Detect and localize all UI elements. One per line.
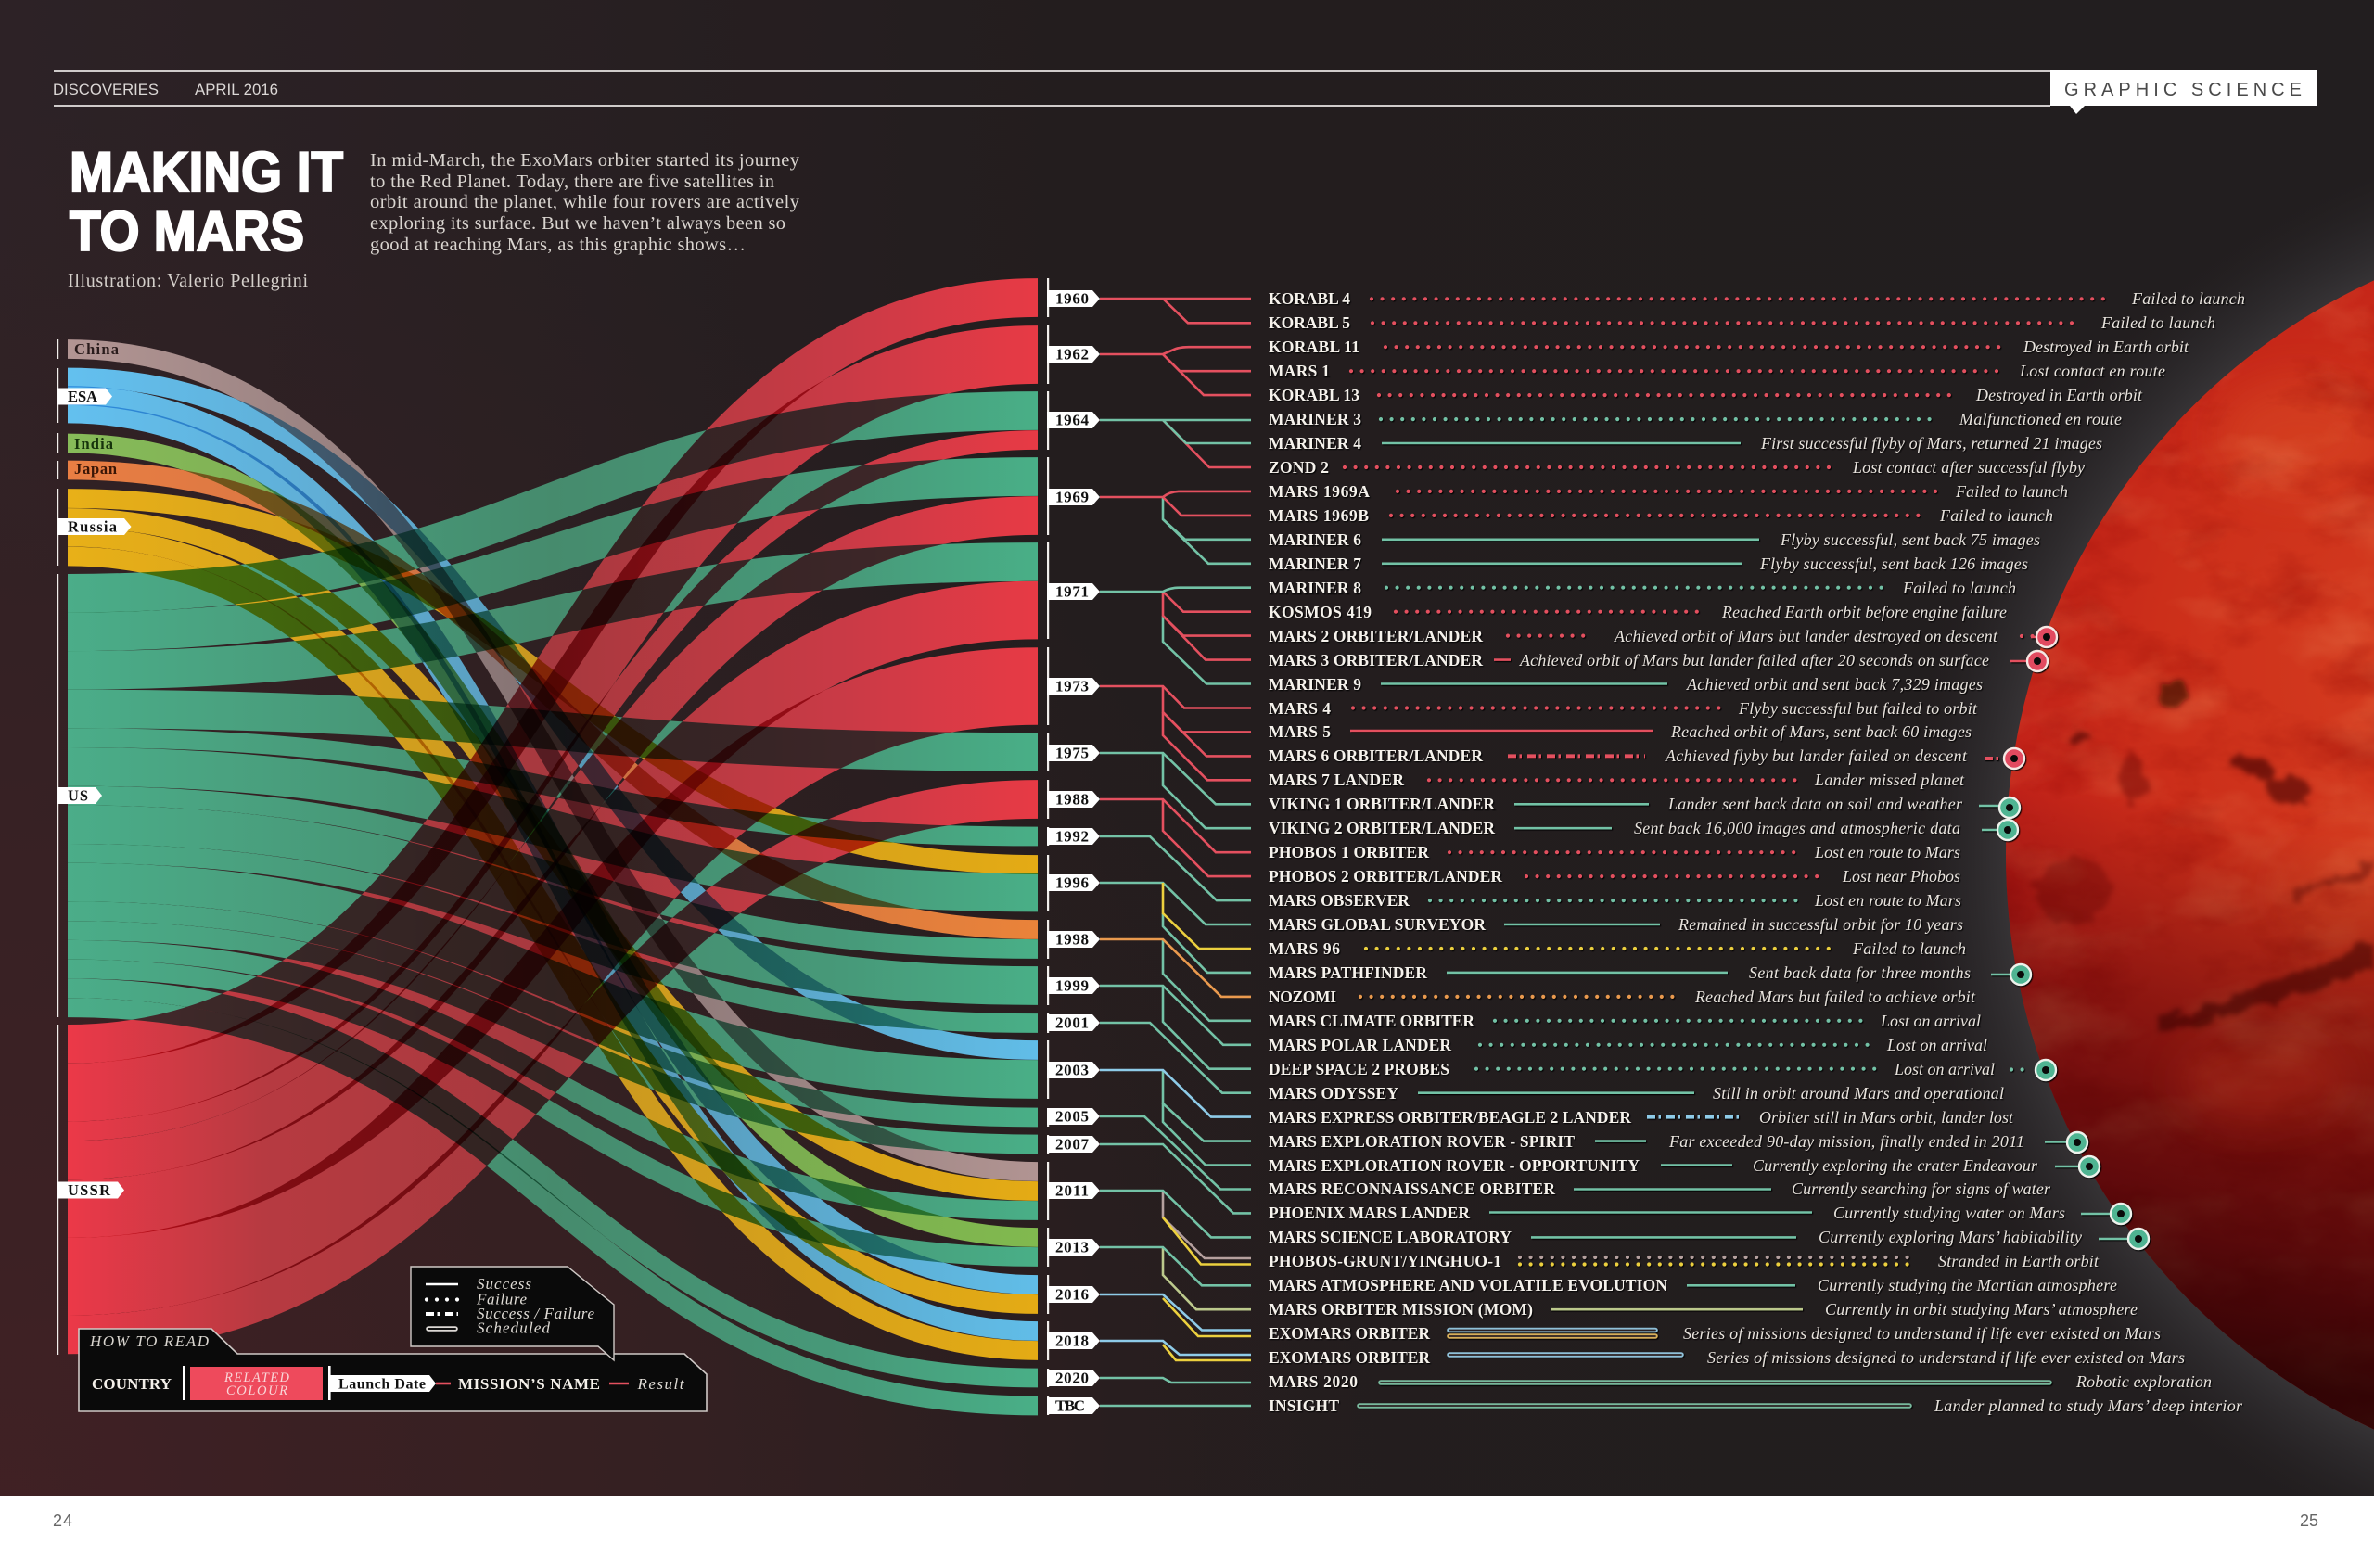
intro text: to the Red Planet. Today, there are five satellites in	[370, 172, 774, 192]
year 2007: 2007	[1055, 1135, 1089, 1154]
row: PHOENIX MARS LANDER: Currently studying water on Mars	[1833, 1204, 2065, 1222]
illustration credit: Illustration: Valerio Pellegrini	[68, 271, 308, 291]
row: KORABL 4	[1269, 289, 2245, 308]
graphic science badge	[2050, 70, 2317, 114]
page number 25: 25	[2300, 1511, 2318, 1530]
row: MARS EXPLORATION ROVER - SPIRIT	[1269, 1132, 2087, 1153]
year 2013: 2013	[1055, 1239, 1089, 1256]
row: PHOBOS 2 ORBITER/LANDER: PHOBOS 2 ORBITER/LANDER	[1269, 867, 1502, 886]
year 2020: 2020	[1055, 1369, 1089, 1387]
how to read panel	[79, 1329, 707, 1411]
row: MARS PATHFINDER: Sent back data for three months	[1749, 963, 1971, 982]
year 1998	[1047, 920, 1251, 1021]
year 1971: 1971	[1055, 582, 1089, 601]
ribbons: Russia	[68, 499, 1038, 1350]
row: KORABL 13	[1269, 386, 2143, 404]
row: MARS SCIENCE LABORATORY: MARS SCIENCE LABORATORY	[1269, 1228, 1512, 1246]
row: MARS OBSERVER: Lost en route to Mars	[1814, 891, 1961, 910]
row: VIKING 2 ORBITER/LANDER: VIKING 2 ORBITER/LANDER	[1269, 819, 1495, 837]
intro text: good at reaching Mars, as this graphic shows…	[370, 235, 746, 255]
row: MARS OBSERVER	[1269, 891, 1961, 910]
key: scheduled	[428, 1319, 551, 1337]
row: MARS 1: Lost contact en route	[2019, 362, 2165, 380]
row: MARS RECONNAISSANCE ORBITER	[1269, 1179, 2051, 1198]
row: MARS 1969A	[1269, 482, 2068, 501]
row: MARS 2020	[1269, 1372, 2212, 1391]
row: PHOENIX MARS LANDER: PHOENIX MARS LANDER	[1269, 1204, 1470, 1222]
row: MARINER 7: Flyby successful, sent back 126 images	[1759, 555, 2028, 573]
country axis bars	[57, 339, 58, 1355]
row: MARS EXPLORATION ROVER - OPPORTUNITY	[1269, 1156, 2100, 1177]
ribbons: China	[68, 349, 1038, 1172]
year 1973	[1047, 647, 1251, 780]
row: MARS 5: Reached orbit of Mars, sent back 60 images	[1670, 722, 1972, 741]
row: EXOMARS ORBITER 2016: EXOMARS ORBITER	[1269, 1324, 1430, 1343]
row: MARS 7 LANDER: Lander missed planet	[1814, 771, 1965, 789]
row: MARINER 3: MARINER 3	[1269, 410, 1361, 428]
row: MARINER 6: Flyby successful, sent back 75 images	[1780, 530, 2040, 549]
row: PHOBOS 2 ORBITER/LANDER: Lost near Phobos	[1842, 867, 1960, 886]
row: MARS 3 ORBITER/LANDER: Achieved orbit of Mars but lander failed after 20 seconds on surface	[1519, 651, 1989, 669]
row: MARS ODYSSEY	[1269, 1084, 2004, 1103]
row: NOZOMI: Reached Mars but failed to achieve orbit	[1694, 988, 1976, 1006]
year 1992	[1047, 827, 1251, 900]
row: MARS GLOBAL SURVEYOR: Remained in successful orbit for 10 years	[1678, 915, 1963, 934]
row: KORABL 13: Destroyed in Earth orbit	[1975, 386, 2143, 404]
row: MARS 3 ORBITER/LANDER	[1269, 651, 2048, 671]
row: MARS EXPLORATION ROVER - SPIRIT: MARS EXPLORATION ROVER - SPIRIT	[1269, 1132, 1575, 1151]
how to read heading: HOW TO READ	[89, 1332, 210, 1350]
row: DEEP SPACE 2 PROBES: DEEP SPACE 2 PROBES	[1269, 1060, 1449, 1078]
row: MARS CLIMATE ORBITER: Lost on arrival	[1880, 1012, 1981, 1030]
year 1992: 1992	[1055, 827, 1089, 846]
country label: China: China	[74, 340, 119, 358]
country label: USSR: USSR	[68, 1181, 111, 1199]
intro text: exploring its surface. But we haven’t always been so	[370, 213, 785, 234]
row: MARS 2 ORBITER/LANDER	[1269, 627, 2057, 647]
row: MARS 1969B: Failed to launch	[1939, 506, 2053, 525]
row: MARINER 4: MARINER 4	[1269, 434, 1361, 453]
intro text	[370, 150, 800, 255]
key: failure	[427, 1291, 527, 1307]
year 2011	[1047, 1162, 1251, 1265]
row: DEEP SPACE 2 PROBES	[1269, 1060, 2056, 1080]
row: MARS 6 ORBITER/LANDER: Achieved flyby but lander failed on descent	[1665, 746, 1968, 765]
row: KORABL 4: KORABL 4	[1269, 289, 1350, 308]
graphic science badge: GRAPHIC SCIENCE	[2064, 80, 2302, 100]
year 1975	[1047, 733, 1251, 828]
row: VIKING 2 ORBITER/LANDER: Sent back 16,000 images and atmospheric data	[1634, 819, 1960, 837]
row: MARS ORBITER MISSION (MOM): MARS ORBITER MISSION (MOM)	[1269, 1300, 1533, 1319]
row: PHOBOS-GRUNT/YINGHUO-1	[1269, 1252, 2100, 1270]
row: MARS GLOBAL SURVEYOR	[1269, 915, 1963, 934]
row: PHOBOS 1 ORBITER	[1269, 843, 1960, 861]
row: MARINER 8	[1269, 579, 2016, 597]
row: PHOENIX MARS LANDER	[1269, 1204, 2131, 1224]
row: MARS 2020: MARS 2020	[1269, 1372, 1358, 1391]
row: MARS 2 ORBITER/LANDER: MARS 2 ORBITER/LANDER	[1269, 627, 1483, 645]
row: MARS 1969A: MARS 1969A	[1269, 482, 1370, 501]
page footer strip	[0, 1496, 2374, 1568]
row: MARS 7 LANDER	[1269, 771, 1965, 789]
row: VIKING 1 ORBITER/LANDER: VIKING 1 ORBITER/LANDER	[1269, 795, 1495, 813]
row: KORABL 5: KORABL 5	[1269, 313, 1350, 332]
ribbons: US	[68, 411, 1038, 1406]
line style key	[411, 1267, 614, 1360]
year 1964: 1964	[1055, 412, 1089, 428]
year TBC	[1047, 1396, 1251, 1415]
row: MARS OBSERVER: MARS OBSERVER	[1269, 891, 1410, 910]
year 1960	[1047, 278, 1251, 323]
country label: India: India	[74, 435, 113, 453]
row: INSIGHT	[1269, 1396, 2243, 1415]
year 1969	[1047, 457, 1251, 564]
row: PHOBOS 2 ORBITER/LANDER	[1269, 867, 1960, 886]
row: MARS RECONNAISSANCE ORBITER: MARS RECONNAISSANCE ORBITER	[1269, 1179, 1555, 1198]
row: MARS 1: MARS 1	[1269, 362, 1330, 380]
ribbons: USSR	[68, 298, 1038, 1334]
section label: DISCOVERIES	[53, 82, 159, 98]
key: success	[426, 1275, 531, 1293]
legend: country: COUNTRY	[92, 1375, 172, 1393]
year 2018: 2018	[1055, 1332, 1089, 1350]
row: DEEP SPACE 2 PROBES: Lost on arrival	[1894, 1060, 1995, 1078]
row: KORABL 4: Failed to launch	[2131, 289, 2245, 308]
row: PHOBOS-GRUNT/YINGHUO-1: PHOBOS-GRUNT/YINGHUO-1	[1269, 1252, 1501, 1270]
row: ZOND 2: Lost contact after successful flyby	[1852, 458, 2085, 477]
row: MARS 4: MARS 4	[1269, 699, 1331, 718]
row: EXOMARS ORBITER 2016	[1269, 1324, 2161, 1343]
row: MARS RECONNAISSANCE ORBITER: Currently searching for signs of water	[1792, 1179, 2051, 1198]
year 1998: 1998	[1055, 931, 1089, 948]
row: MARINER 4: First successful flyby of Mars, returned 21 images	[1760, 434, 2102, 453]
page number 24: 24	[53, 1511, 72, 1530]
year 2001: 2001	[1055, 1014, 1089, 1031]
row: KOSMOS 419: KOSMOS 419	[1269, 603, 1372, 621]
year 2003	[1047, 1040, 1251, 1165]
legend: related colour swatch	[183, 1366, 323, 1400]
key: success / failure: Success / Failure	[477, 1305, 594, 1322]
row: KOSMOS 419	[1269, 603, 2007, 621]
row: INSIGHT: Lander planned to study Mars’ deep interior	[1934, 1396, 2243, 1415]
row: MARS 6 ORBITER/LANDER: MARS 6 ORBITER/LANDER	[1269, 746, 1483, 765]
row: MARS CLIMATE ORBITER: MARS CLIMATE ORBITER	[1269, 1012, 1474, 1030]
row: MARINER 8: MARINER 8	[1269, 579, 1361, 597]
year 2016: 2016	[1055, 1285, 1089, 1304]
country label: Japan: Japan	[74, 460, 117, 478]
row: MARS ATMOSPHERE AND VOLATILE EVOLUTION	[1269, 1276, 2117, 1294]
row: MARS EXPRESS ORBITER/BEAGLE 2 LANDER	[1269, 1108, 2014, 1127]
row: MARS 2 ORBITER/LANDER: Achieved orbit of Mars but lander destroyed on descent	[1614, 627, 1998, 645]
row: KORABL 11: Destroyed in Earth orbit	[2023, 338, 2189, 356]
row: EXOMARS ORBITER 2016: Series of missions designed to understand if life ever existed on Mars	[1683, 1324, 2161, 1343]
year 1996	[1047, 855, 1251, 973]
row: MARINER 9: MARINER 9	[1269, 675, 1361, 694]
country label: US: US	[68, 786, 88, 805]
year 1971	[1047, 542, 1251, 684]
legend: launch date tag	[328, 1366, 436, 1400]
row: MARS 5	[1269, 722, 1972, 741]
row: MARINER 6	[1269, 530, 2040, 549]
row: MARINER 9: Achieved orbit and sent back 7,329 images	[1686, 675, 1983, 694]
row: MARINER 3	[1269, 410, 2122, 428]
country label: Russia	[57, 517, 132, 536]
row: MARS SCIENCE LABORATORY	[1269, 1228, 2149, 1249]
key: failure: Failure	[476, 1291, 527, 1307]
row: PHOBOS 1 ORBITER: Lost en route to Mars	[1814, 843, 1960, 861]
year 1999	[1047, 966, 1251, 1069]
row: EXOMARS ORBITER 2018: Series of missions designed to understand if life ever existed on Mars	[1707, 1348, 2185, 1367]
row: MARS POLAR LANDER: Lost on arrival	[1886, 1036, 1987, 1054]
row: MARS PATHFINDER	[1269, 963, 2031, 985]
title	[70, 141, 343, 262]
row: MARS ORBITER MISSION (MOM): Currently in orbit studying Mars’ atmosphere	[1825, 1300, 2138, 1319]
year 1975: 1975	[1055, 744, 1089, 762]
title: TO MARS	[70, 200, 304, 262]
year 2007	[1047, 1135, 1251, 1213]
row: MARS 7 LANDER: MARS 7 LANDER	[1269, 771, 1404, 789]
country label: Russia: Russia	[68, 517, 117, 536]
row: MARS POLAR LANDER: MARS POLAR LANDER	[1269, 1036, 1451, 1054]
ribbons: ESA	[68, 377, 1038, 1332]
legend: related colour swatch: RELATED	[223, 1370, 290, 1385]
row: NOZOMI: NOZOMI	[1269, 988, 1336, 1006]
row: MARS ORBITER MISSION (MOM)	[1269, 1300, 2138, 1319]
row: MARS 4	[1269, 699, 1978, 718]
row: ZOND 2	[1269, 458, 2085, 477]
planet Mars	[1957, 227, 2374, 1482]
row: MARS ATMOSPHERE AND VOLATILE EVOLUTION: Currently studying the Martian atmosphere	[1818, 1276, 2117, 1294]
year tags and connectors	[1047, 278, 1251, 1415]
year 2020	[1047, 1369, 1251, 1387]
row: MARS ODYSSEY: Still in orbit around Mars and operational	[1713, 1084, 2004, 1103]
row: VIKING 2 ORBITER/LANDER	[1269, 819, 2018, 840]
row: MARS 96: MARS 96	[1269, 939, 1340, 958]
intro text: orbit around the planet, while four rovers are actively	[370, 192, 800, 212]
row: MARS 1969B: MARS 1969B	[1269, 506, 1369, 525]
row: KOSMOS 419: Reached Earth orbit before engine failure	[1721, 603, 2007, 621]
row: KORABL 11	[1269, 338, 2189, 356]
row: MARINER 3: Malfunctioned en route	[1959, 410, 2122, 428]
header rules	[54, 70, 2050, 107]
row: MARINER 7: MARINER 7	[1269, 555, 1361, 573]
row: MARS 4: Flyby successful but failed to orbit	[1738, 699, 1978, 718]
row: MARS EXPRESS ORBITER/BEAGLE 2 LANDER: Orbiter still in Mars orbit, lander lost	[1759, 1108, 2014, 1127]
legend: result: Result	[636, 1375, 685, 1393]
ribbons: Japan	[68, 470, 1038, 929]
row: EXOMARS ORBITER 2018	[1269, 1348, 2185, 1367]
year 2018	[1047, 1321, 1251, 1360]
row: KORABL 11: KORABL 11	[1269, 338, 1359, 356]
year 2011: 2011	[1055, 1181, 1089, 1200]
year 1988: 1988	[1055, 790, 1089, 809]
row: MARS SCIENCE LABORATORY: Currently exploring Mars’ habitability	[1819, 1228, 2082, 1246]
row: MARS EXPRESS ORBITER/BEAGLE 2 LANDER: MARS EXPRESS ORBITER/BEAGLE 2 LANDER	[1269, 1108, 1631, 1127]
title: MAKING IT	[70, 141, 343, 203]
year 2005: 2005	[1055, 1107, 1089, 1126]
row: MARINER 4	[1269, 434, 2102, 453]
legend: result	[609, 1375, 685, 1393]
year 1973: 1973	[1055, 677, 1089, 695]
row: MARS POLAR LANDER	[1269, 1036, 1987, 1054]
country label: US	[57, 786, 102, 805]
row: MARINER 7	[1269, 555, 2028, 573]
row: MARINER 8: Failed to launch	[1902, 579, 2016, 597]
year 1962: 1962	[1055, 345, 1089, 363]
country label: ESA: ESA	[68, 388, 97, 405]
country label: ESA	[57, 388, 112, 405]
row: PHOBOS-GRUNT/YINGHUO-1: Stranded in Earth orbit	[1938, 1252, 2100, 1270]
legend: related colour swatch: COLOUR	[226, 1383, 287, 1398]
row: NOZOMI	[1269, 988, 1976, 1006]
year 2005	[1047, 1107, 1251, 1189]
row: MARS 1969A: Failed to launch	[1955, 482, 2068, 501]
row: MARS 2020: Robotic exploration	[2075, 1372, 2212, 1391]
year 2003: 2003	[1055, 1061, 1089, 1079]
row: PHOBOS 1 ORBITER: PHOBOS 1 ORBITER	[1269, 843, 1429, 861]
row: MARS EXPLORATION ROVER - SPIRIT: Far exceeded 90-day mission, finally ended in 2011	[1668, 1132, 2024, 1151]
row: MARS EXPLORATION ROVER - OPPORTUNITY: Currently exploring the crater Endeavour	[1753, 1156, 2038, 1175]
row: MARS 1969B	[1269, 506, 2053, 525]
year 1999: 1999	[1055, 977, 1089, 994]
row: MARS PATHFINDER: MARS PATHFINDER	[1269, 963, 1427, 982]
year 2013	[1047, 1228, 1251, 1309]
row: MARS 96	[1269, 939, 1966, 958]
row: KORABL 5: Failed to launch	[2100, 313, 2215, 332]
legend: mission's name: MISSION’S NAME	[458, 1375, 600, 1393]
row: MARS CLIMATE ORBITER	[1269, 1012, 1981, 1030]
row: ZOND 2: ZOND 2	[1269, 458, 1329, 477]
year 2001	[1047, 1013, 1251, 1093]
year 2016	[1047, 1275, 1251, 1336]
year 1988	[1047, 780, 1251, 876]
year 1960: 1960	[1055, 289, 1089, 308]
mission list	[1269, 289, 2245, 1415]
row: MARS 96: Failed to launch	[1852, 939, 1966, 958]
issue date: APRIL 2016	[195, 82, 278, 98]
row: MARS GLOBAL SURVEYOR: MARS GLOBAL SURVEYOR	[1269, 915, 1486, 934]
row: MARINER 9	[1269, 675, 1983, 694]
year TBC: TBC	[1055, 1396, 1085, 1415]
key: success: Success	[477, 1275, 531, 1293]
row: KORABL 13: KORABL 13	[1269, 386, 1359, 404]
row: EXOMARS ORBITER 2018: EXOMARS ORBITER	[1269, 1348, 1430, 1367]
row: VIKING 1 ORBITER/LANDER	[1269, 795, 2020, 818]
row: MARS 5: MARS 5	[1269, 722, 1331, 741]
row: MARS 1	[1269, 362, 2165, 380]
key: scheduled: Scheduled	[477, 1319, 551, 1337]
intro text: In mid-March, the ExoMars orbiter started its journey	[370, 150, 800, 171]
row: VIKING 1 ORBITER/LANDER: Lander sent back data on soil and weather	[1667, 795, 1963, 813]
year 1962	[1047, 325, 1251, 395]
year 1964	[1047, 391, 1251, 467]
legend: launch date tag: Launch Date	[338, 1376, 426, 1393]
year 1996: 1996	[1055, 873, 1089, 892]
row: MARS ODYSSEY: MARS ODYSSEY	[1269, 1084, 1398, 1103]
row: MARS ATMOSPHERE AND VOLATILE EVOLUTION: MARS ATMOSPHERE AND VOLATILE EVOLUTION	[1269, 1276, 1667, 1294]
row: MARS 6 ORBITER/LANDER	[1269, 746, 2024, 769]
country label: USSR	[57, 1181, 124, 1199]
row: KORABL 5	[1269, 313, 2215, 332]
ribbons: India	[68, 443, 1038, 1237]
row: MARS EXPLORATION ROVER - OPPORTUNITY: MARS EXPLORATION ROVER - OPPORTUNITY	[1269, 1156, 1640, 1175]
row: MARINER 6: MARINER 6	[1269, 530, 1361, 549]
sankey chart: countries to launch years	[68, 298, 1038, 1406]
year 1969: 1969	[1055, 488, 1089, 506]
row: MARS 3 ORBITER/LANDER: MARS 3 ORBITER/LANDER	[1269, 651, 1483, 669]
row: INSIGHT: INSIGHT	[1269, 1396, 1339, 1415]
